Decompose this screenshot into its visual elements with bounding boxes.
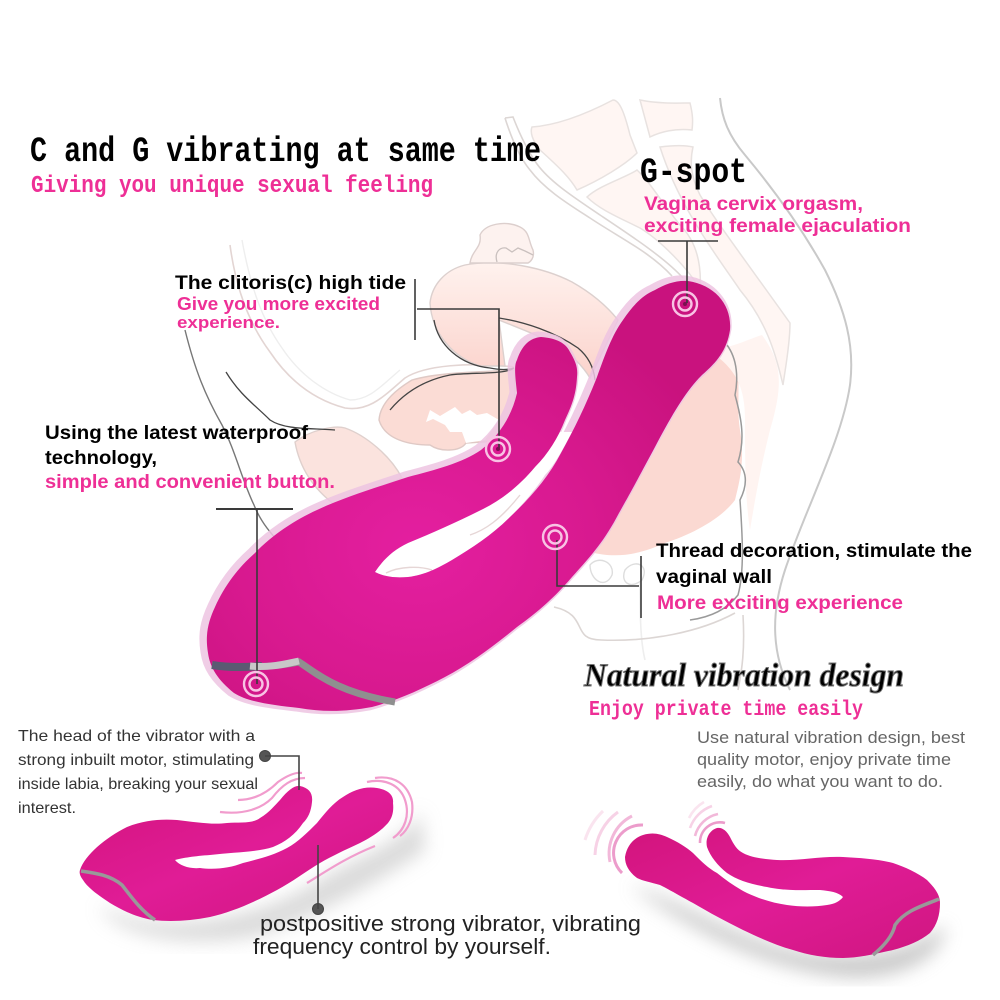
- motion marks tip: [689, 802, 725, 843]
- fallopian top: [470, 224, 533, 263]
- callout: head of vibrator: [260, 750, 299, 790]
- body: [625, 828, 940, 958]
- spine vertebrae: [531, 100, 790, 385]
- anatomical illustration: [185, 98, 851, 690]
- text: clitoris: [175, 273, 406, 332]
- text: clitoris: The clitoris(c) high tide: [175, 273, 406, 294]
- callout: postpositive: [312, 845, 324, 914]
- heading: G-spot: Vagina cervix orgasm,: [644, 194, 863, 215]
- text: postpositive vibrator: frequency control by yourself.: [253, 934, 551, 959]
- back contour: [720, 98, 851, 690]
- gap detail lines: [386, 495, 520, 573]
- bladder: [430, 263, 618, 378]
- gray pelvic line: [185, 330, 277, 540]
- text: thread decoration: [656, 541, 972, 614]
- heading: G-spot: [640, 153, 911, 237]
- text: postpositive vibrator: [253, 911, 641, 959]
- heading: natural vibration: Enjoy private time easily: [589, 699, 863, 722]
- title: Giving you unique sexual feeling: [31, 173, 433, 200]
- text: clitoris: experience.: [177, 313, 280, 332]
- right dark lines: [690, 345, 745, 620]
- heading: G-spot: exciting female ejaculation: [644, 216, 911, 237]
- body: [207, 281, 730, 711]
- text: natural vibration description: quality motor, enjoy private time: [697, 751, 951, 769]
- motion marks head: [585, 811, 643, 873]
- heading: G-spot: G-spot: [640, 153, 747, 193]
- text: waterproof: Using the latest waterproof: [45, 423, 309, 444]
- text: head of vibrator: strong inbuilt motor, stimulating: [18, 752, 254, 769]
- uterus: [379, 370, 515, 450]
- shadow: [630, 885, 945, 977]
- gap reveal: [375, 432, 572, 577]
- dark organ lines: [226, 318, 595, 430]
- metal band: [81, 871, 155, 920]
- small vibrator right: [585, 802, 945, 977]
- rectum tube lines: [505, 98, 851, 690]
- halo: [204, 280, 727, 710]
- lower organ outlines: [590, 560, 644, 585]
- text: thread decoration: vaginal wall: [656, 567, 772, 588]
- band reflection: [212, 665, 262, 667]
- text: head of vibrator: The head of the vibrator with a: [18, 728, 255, 745]
- metal button band: [212, 662, 395, 702]
- heading: natural vibration: [583, 658, 904, 722]
- text: natural vibration description: [697, 729, 965, 791]
- text: natural vibration description: Use natural vibration design, best: [697, 729, 965, 747]
- text: natural vibration description: easily, do what you want to do.: [697, 773, 943, 791]
- motion marks: [220, 773, 412, 883]
- main vibrator: [204, 280, 730, 711]
- text: head of vibrator: interest.: [18, 800, 76, 817]
- uterus cavity: [426, 407, 499, 443]
- text: waterproof: [45, 423, 335, 493]
- text: head of vibrator: inside labia, breaking your sexual: [18, 776, 258, 793]
- text: waterproof: technology,: [45, 448, 157, 469]
- target markers: [244, 292, 697, 696]
- text: head of vibrator: [18, 728, 258, 817]
- callout lines: [216, 241, 718, 684]
- ovary: [295, 427, 402, 505]
- text: thread decoration: Thread decoration, stimulate the: [656, 541, 972, 562]
- text: postpositive vibrator: postpositive strong vibrator, vibrating: [260, 911, 641, 936]
- pubic bone outline: [230, 245, 514, 409]
- title: C and G vibrating at same time: [30, 132, 541, 172]
- body: [80, 786, 393, 921]
- rectum pink area: [590, 345, 742, 555]
- text: thread decoration: More exciting experience: [657, 593, 903, 614]
- shadow: [100, 810, 425, 941]
- metal band: [873, 899, 939, 955]
- heading: natural vibration: Natural vibration design: [583, 658, 904, 694]
- title: [30, 132, 541, 200]
- text: waterproof: simple and convenient button.: [45, 472, 335, 493]
- text: clitoris: Give you more excited: [177, 294, 380, 314]
- small vibrator left: [80, 773, 425, 941]
